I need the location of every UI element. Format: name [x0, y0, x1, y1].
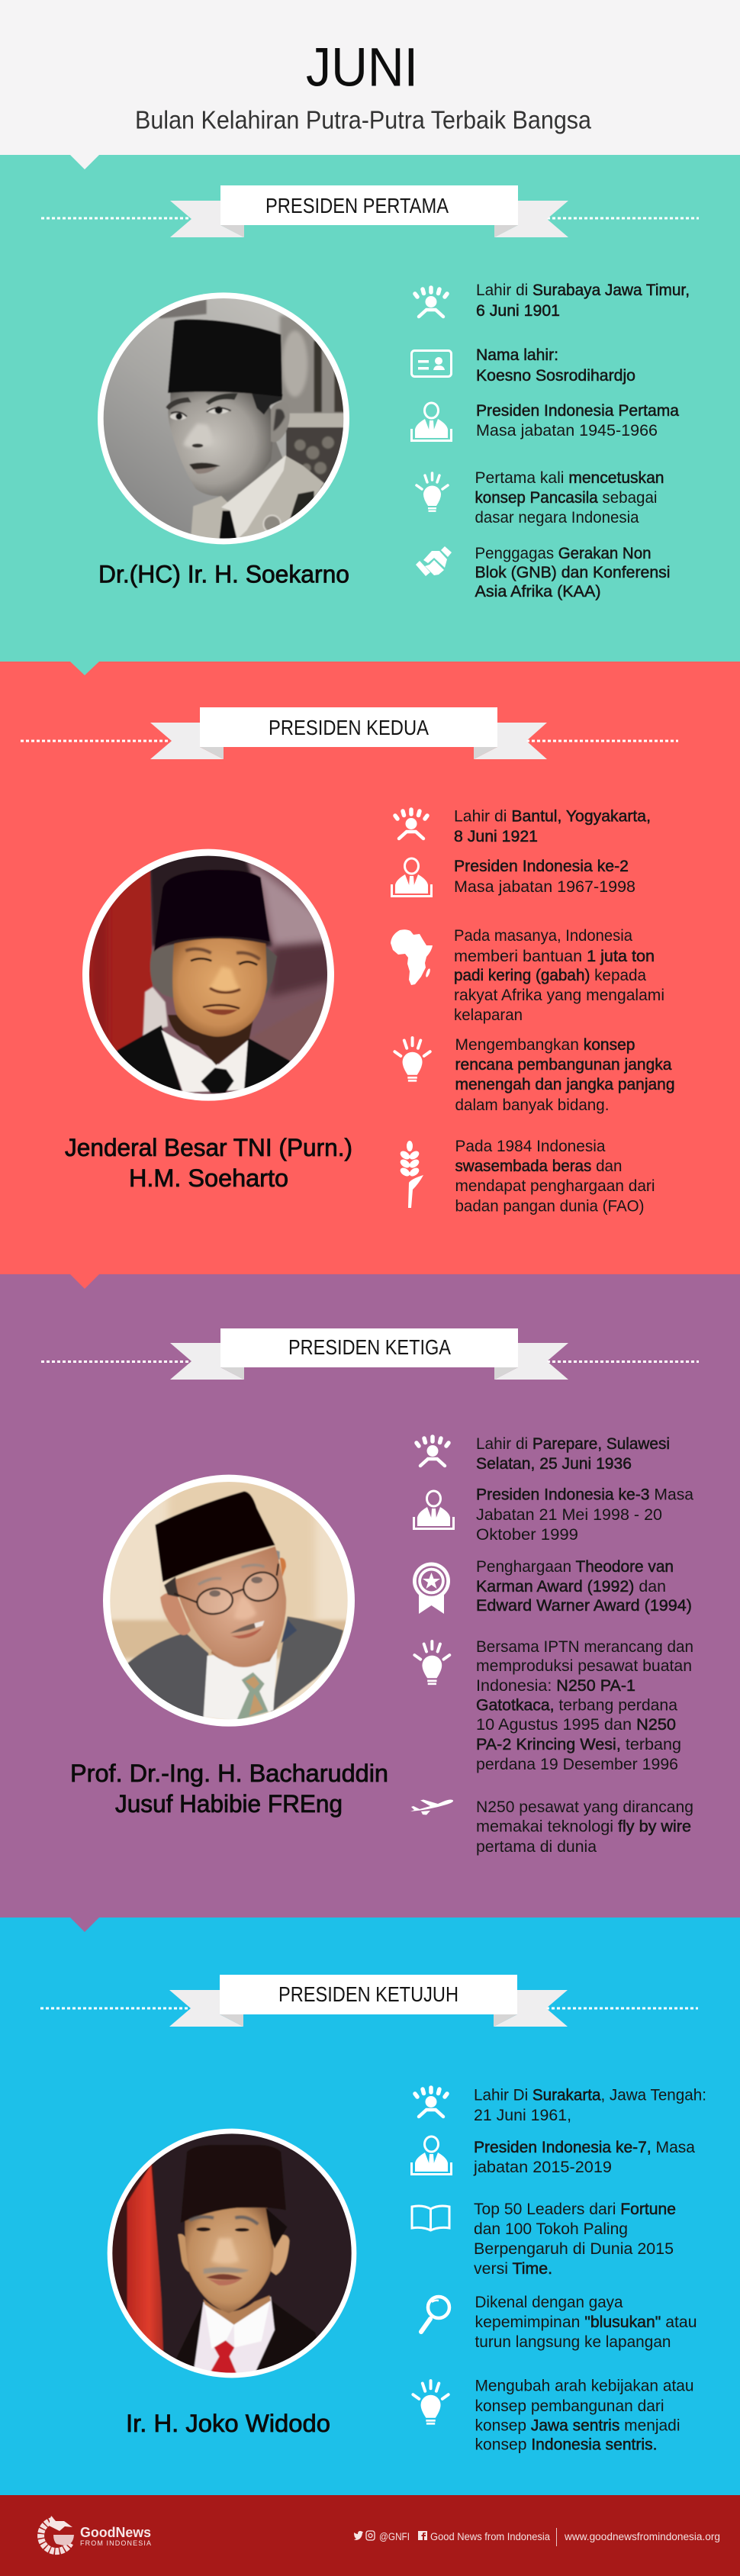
- fact: birth: Lahir di Bantul, Yogyakarta,: [454, 807, 651, 826]
- panel: presiden kedua: rencana pembangunan jangka: [455, 1056, 672, 1074]
- teal notch: [70, 662, 99, 675]
- portrait: Soeharto: [82, 849, 336, 1101]
- icon: light bulb: [414, 1641, 449, 1685]
- logo: garuda G: [41, 2516, 74, 2552]
- ribbon: presiden kedua: PRESIDEN KEDUA: [269, 716, 430, 739]
- website: www.goodnewsfromindonesia.org: [564, 2531, 720, 2542]
- purple notch: [70, 1918, 99, 1932]
- logo wordmark: [80, 2524, 151, 2547]
- president name: [65, 1134, 352, 1192]
- icon: president: [412, 2136, 452, 2175]
- icon: baby: [415, 288, 447, 317]
- panel: presiden kedua: rakyat Afrika yang mengalami: [454, 987, 664, 1004]
- panel: presiden ketiga: Indonesia: N250 PA-1: [476, 1677, 635, 1695]
- fact: fly by wire: N250 pesawat yang dirancang: [476, 1798, 693, 1816]
- icon: baby: [415, 2088, 447, 2117]
- panel: presiden kedua: badan pangan dunia (FAO): [455, 1198, 644, 1215]
- panel: presiden kedua: [0, 662, 740, 1275]
- panel: presiden pertama: Masa jabatan 1945-1966: [476, 422, 658, 440]
- icon: president: [413, 1491, 453, 1529]
- icon: president: [412, 403, 452, 441]
- red notch: [70, 1274, 99, 1289]
- icon: magnifier: [421, 2297, 449, 2332]
- fact: birth: Lahir Di Surakarta, Jawa Tengah:: [474, 2086, 706, 2104]
- fact: development concept: Mengembangkan konsep: [455, 1036, 635, 1054]
- panel: presiden ketiga: perdana 19 Desember 1996: [476, 1756, 678, 1773]
- portrait: Soekarno: [98, 292, 349, 544]
- logo wordmark: FROM INDONESIA: [80, 2539, 151, 2547]
- fact: fortune and time: Top 50 Leaders dari Fortune: [474, 2201, 676, 2218]
- icon: light bulb: [417, 473, 448, 512]
- fact: office: Presiden Indonesia ke-3 Masa: [476, 1486, 693, 1503]
- panel: presiden ketiga: Edward Warner Award (1994): [476, 1597, 692, 1615]
- panel: presiden pertama: Asia Afrika (KAA): [475, 583, 601, 601]
- fact: aid to africa: Pada masanya, Indonesia: [454, 927, 632, 945]
- president name: Ir. H. Joko Widodo: [126, 2410, 330, 2437]
- president name: Prof. Dr.-Ing. H. Bacharuddin: [70, 1760, 388, 1787]
- icon: wheat: [399, 1141, 423, 1208]
- fact: birth: Lahir di Surabaya Jawa Timur,: [476, 282, 690, 299]
- fact: birth: Lahir di Parepare, Sulawesi: [476, 1435, 670, 1453]
- title: JUNI: [306, 38, 418, 98]
- panel: presiden ketujuh: jabatan 2015-2019: [473, 2159, 612, 2176]
- panel: presiden kedua: swasembada beras dan: [455, 1158, 623, 1175]
- social handle: @GNFI: [379, 2531, 410, 2542]
- panel: presiden pertama: 6 Juni 1901: [476, 302, 560, 320]
- icon: light bulb: [394, 1038, 430, 1082]
- panel: presiden ketujuh: dan 100 Tokoh Paling: [474, 2220, 628, 2238]
- icon: open book: [412, 2206, 449, 2230]
- panel: presiden ketiga: memakai teknologi fly by wire: [476, 1818, 691, 1836]
- portrait: Joko Widodo: [108, 2129, 359, 2381]
- panel: presiden ketiga: Oktober 1999: [476, 1526, 578, 1544]
- panel: presiden ketujuh: konsep Jawa sentris menjadi: [475, 2417, 680, 2434]
- fact: pancasila: Pertama kali mencetuskan: [475, 469, 664, 487]
- icon: instagram: [366, 2531, 375, 2540]
- fact: indonesia sentris: Mengubah arah kebijakan atau: [475, 2378, 694, 2394]
- panel: presiden kedua: kelaparan: [454, 1006, 523, 1024]
- fact: office: Presiden Indonesia Pertama: [476, 402, 679, 420]
- logo wordmark: GoodNews: [80, 2524, 151, 2540]
- panel: presiden pertama: Koesno Sosrodihardjo: [476, 367, 635, 385]
- header notch: [70, 155, 99, 169]
- ribbon: presiden ketiga: [41, 1328, 699, 1380]
- ribbon: presiden pertama: [41, 185, 699, 237]
- panel: presiden kedua: dalam banyak bidang.: [455, 1096, 609, 1114]
- panel: presiden ketujuh: 21 Juni 1961,: [474, 2107, 571, 2124]
- panel: presiden pertama: Blok (GNB) dan Konferensi: [475, 564, 670, 581]
- footer: [0, 2495, 740, 2576]
- panel: presiden ketujuh: Berpengaruh di Dunia 2015: [474, 2240, 674, 2258]
- panel: presiden kedua: mendapat penghargaan dari: [455, 1177, 655, 1195]
- panel: presiden ketiga: Jabatan 21 Mei 1998 - 20: [476, 1506, 662, 1524]
- panel: presiden pertama: [0, 155, 740, 662]
- panel: presiden ketujuh: konsep pembangunan dari: [475, 2397, 664, 2415]
- panel: presiden pertama: konsep Pancasila sebagai: [475, 489, 658, 507]
- icon: baby: [395, 810, 427, 839]
- panel: presiden ketiga: Karman Award (1992) dan: [476, 1578, 666, 1596]
- president name: [70, 1760, 388, 1818]
- header panel: [0, 0, 740, 156]
- fact: blusukan: Dikenal dengan gaya: [475, 2294, 623, 2311]
- panel: presiden ketujuh: versi Time.: [474, 2260, 552, 2278]
- panel: presiden pertama: dasar negara Indonesia: [475, 509, 639, 526]
- panel: presiden ketujuh: konsep Indonesia sentris.: [475, 2436, 658, 2454]
- panel: presiden ketujuh: [0, 1918, 740, 2495]
- icon: light bulb: [413, 2381, 449, 2425]
- portrait: Habibie: [103, 1475, 356, 1727]
- panel: presiden ketiga: 10 Agustus 1995 dan N250: [476, 1716, 676, 1734]
- panel: presiden ketiga: memproduksi pesawat buatan: [476, 1657, 692, 1675]
- icon: facebook: [418, 2531, 427, 2540]
- panel: presiden kedua: menengah dan jangka panjang: [455, 1076, 674, 1093]
- icon: handshake: [416, 546, 452, 576]
- president name: H.M. Soeharto: [129, 1164, 288, 1192]
- fact: awards: Penghargaan Theodore van: [476, 1558, 674, 1576]
- panel: presiden ketiga: Gatotkaca, terbang perdana: [476, 1697, 677, 1714]
- icon: twitter: [354, 2531, 363, 2540]
- panel: presiden kedua: 8 Juni 1921: [454, 828, 538, 845]
- fact: GNB KAA: Penggagas Gerakan Non: [475, 545, 652, 562]
- panel: presiden kedua: padi kering (gabah) kepada: [454, 967, 646, 984]
- panel: presiden ketujuh: kepemimpinan "blusukan" atau: [475, 2314, 697, 2331]
- fact: N250 aircraft: Bersama IPTN merancang dan: [476, 1638, 693, 1656]
- panel: presiden ketiga: Selatan, 25 Juni 1936: [476, 1455, 632, 1473]
- ribbon: presiden ketujuh: PRESIDEN KETUJUH: [278, 1982, 458, 2006]
- ribbon: presiden pertama: PRESIDEN PERTAMA: [265, 194, 449, 217]
- panel: presiden ketujuh: turun langsung ke lapangan: [475, 2333, 671, 2351]
- ribbon: presiden kedua: [21, 707, 678, 759]
- icon: airplane: [410, 1799, 453, 1814]
- president name: Jenderal Besar TNI (Purn.): [65, 1134, 352, 1161]
- icon: medal: [413, 1563, 450, 1614]
- fact: birth name: Nama lahir:: [476, 346, 558, 364]
- fact: office: Presiden Indonesia ke-2: [454, 858, 629, 875]
- panel: presiden ketiga: PA-2 Krincing Wesi, terbang: [476, 1736, 681, 1753]
- ribbon: presiden ketujuh: [40, 1975, 698, 2027]
- president name: Dr.(HC) Ir. H. Soekarno: [98, 560, 349, 588]
- panel: presiden kedua: Masa jabatan 1967-1998: [454, 878, 635, 896]
- panel: presiden kedua: memberi bantuan 1 juta ton: [454, 948, 655, 965]
- divider: [556, 2528, 557, 2546]
- fact: rice self sufficiency: Pada 1984 Indonesia: [455, 1138, 606, 1155]
- president name: Jusuf Habibie FREng: [115, 1790, 343, 1818]
- ribbon: presiden ketiga: PRESIDEN KETIGA: [288, 1335, 452, 1359]
- facebook page: Good News from Indonesia: [430, 2531, 550, 2542]
- subtitle: Bulan Kelahiran Putra-Putra Terbaik Bangsa: [135, 105, 592, 134]
- icon: id card: [412, 351, 452, 377]
- fact: office: Presiden Indonesia ke-7, Masa: [474, 2139, 695, 2156]
- icon: president: [392, 858, 432, 896]
- icon: baby: [417, 1437, 449, 1466]
- icon: africa: [391, 929, 433, 985]
- panel: presiden ketiga: [0, 1274, 740, 1918]
- panel: presiden ketiga: pertama di dunia: [476, 1838, 597, 1856]
